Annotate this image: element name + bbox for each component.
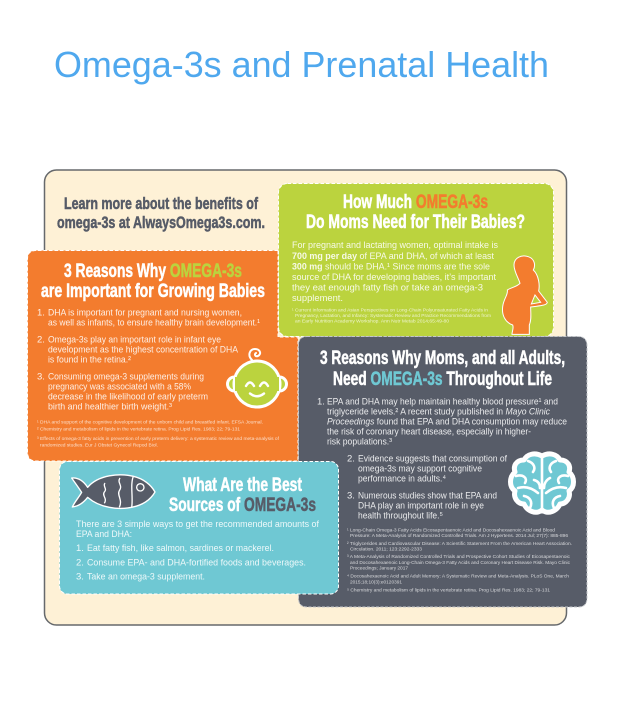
body text: best sources: 1. <box>76 543 84 554</box>
footnotes: how much omega-3s: an Early Nutrition Academy Workshop. Ann Nutr Metab 2014;65:49-80 <box>295 318 449 324</box>
body text: intake recommendation: For pregnant and lactating women, optimal intake is <box>292 240 498 251</box>
body text: intake recommendation: source of DHA for developing babies, it’s important <box>292 272 496 283</box>
body text: intake recommendation: they eat enough fatty fish or take an omega-3 <box>292 282 483 294</box>
footnotes: moms and adults: Pressure: A Meta-Analysis of Randomized Controlled Trials. Am J Hypertens. 2014 Jul; 27(7): 885-896 <box>350 533 568 539</box>
list: growing babies reasons: birth and healthier birth weight.³ <box>48 402 172 412</box>
footnotes: how much omega-3s <box>292 308 491 324</box>
icon: fish <box>72 475 155 508</box>
heading: how much omega-3s: How Much OMEGA-3s <box>343 191 488 213</box>
list: growing babies reasons: Consuming omega-3 supplements during <box>48 372 204 382</box>
list: moms and adults reasons: performance in adults.⁴ <box>358 474 446 484</box>
body text: intake recommendation: 700 mg per day of EPA and DHA, of which at least <box>292 251 494 262</box>
list: growing babies reasons: DHA is important for pregnant and nursing women, <box>48 308 242 318</box>
heading: moms and adults: Need OMEGA-3s Throughout Life <box>333 368 552 390</box>
list: moms and adults reasons: 1. <box>317 396 325 408</box>
list: moms and adults reasons: 3. <box>347 490 355 502</box>
heading: moms and adults <box>320 347 565 390</box>
footnotes: how much omega-3s: ¹ Current Information and Asian Perspectives on Long-Chain Polyunsaturated Fatty Acids in <box>292 308 488 314</box>
list: growing babies reasons: 3. <box>37 372 45 382</box>
list: moms and adults reasons: the risk of coronary heart disease, especially in higher- <box>327 426 531 438</box>
call to action text: Learn more about the benefits of <box>64 195 258 213</box>
heading: how much omega-3s: Do Moms Need for Their Babies? <box>306 211 525 233</box>
list: growing babies reasons: development as the highest concentration of DHA <box>48 344 239 356</box>
list: growing babies reasons: Omega-3s play an important role in infant eye <box>48 334 221 346</box>
body text: best sources: EPA and DHA: <box>76 529 132 540</box>
footnotes: moms and adults: ³ A Meta-Analysis of Randomized Controlled Trials and Prospective Cohort Studies of Eicosapentaenoic <box>347 554 571 560</box>
list: moms and adults reasons: DHA play an important role in eye <box>358 500 484 512</box>
body text: best sources: Consume EPA- and DHA-fortified foods and beverages. <box>87 558 306 568</box>
panel: cream background <box>44 170 566 625</box>
body text: intake recommendation: supplement. <box>292 293 343 304</box>
body text: best sources: 3. <box>76 572 84 582</box>
list: growing babies reasons <box>37 308 260 412</box>
list: moms and adults reasons: Proceedings found that EPA and DHA consumption may reduce <box>327 416 567 428</box>
call to action text: omega-3s at AlwaysOmega3s.com. <box>57 214 265 232</box>
icon: pregnant woman <box>502 256 547 334</box>
list: moms and adults reasons: Evidence suggests that consumption of <box>358 454 507 464</box>
heading: best sources <box>169 474 316 516</box>
list: growing babies reasons: decrease in the likelihood of early preterm <box>48 392 208 402</box>
body text: intake recommendation: 300 mg should be DHA.¹ Since moms are the sole <box>292 262 490 272</box>
heading: growing babies: are Important for Growing Babies <box>41 280 265 302</box>
list: moms and adults reasons: health throughout life.⁵ <box>358 510 443 522</box>
body text: intake recommendation <box>292 240 498 304</box>
footnotes: moms and adults: ¹ Long-Chain Omega-3 Fatty Acids Eicosapentaenoic Acid and Docosahexaenoic Acid and Blood <box>347 528 555 534</box>
icon: baby face <box>228 349 286 407</box>
call to action text <box>57 195 265 232</box>
list: growing babies reasons: as well as infants, to ensure healthy brain development.¹ <box>48 318 260 328</box>
footnotes: moms and adults <box>347 528 572 594</box>
footnotes: moms and adults: Circulation. 2011; 123:2292-2333 <box>350 546 422 552</box>
body text: best sources: Take an omega-3 supplement. <box>87 572 205 582</box>
heading: best sources: What Are the Best <box>183 474 302 496</box>
body text: best sources: There are 3 simple ways to get the recommended amounts of <box>76 519 319 530</box>
footnotes: growing babies: ³ Effects of omega-3 fatty acids in prevention of early preterm delivery: a systematic review and meta-analysis of <box>37 436 280 442</box>
list: growing babies reasons: 1. <box>37 308 45 318</box>
panel: how much omega-3s <box>278 184 554 336</box>
list: moms and adults reasons <box>317 396 567 522</box>
icon: brain <box>510 454 574 512</box>
list: moms and adults reasons: risk populations.³ <box>327 436 392 448</box>
footnotes: moms and adults: ⁴ Docosahexaenoic Acid and Adult Memory: A Systematic Review and Meta-Analysis. PLoS One, March <box>347 574 569 580</box>
list: growing babies reasons: 2. <box>37 334 45 346</box>
panel: best sources <box>60 462 338 594</box>
body text: best sources: Eat fatty fish, like salmon, sardines or mackerel. <box>87 543 274 554</box>
heading: growing babies <box>41 260 265 302</box>
list: moms and adults reasons: 2. <box>347 454 355 464</box>
footnotes: moms and adults: and Docosahexaenoic Long-Chain Omega-3 Fatty Acids and Coronary Heart Disease Risk. Mayo Clinic <box>350 560 571 566</box>
panel: 3 reasons growing babies <box>28 250 298 461</box>
heading: how much omega-3s <box>306 191 525 233</box>
footnotes: growing babies: ¹ DHA and support of the cognitive development of the unborn child and breastfed infant. EFSA Journal. <box>37 420 263 426</box>
list: moms and adults reasons: EPA and DHA may help maintain healthy blood pressure¹ and <box>327 396 558 408</box>
footnotes: growing babies: randomized studies. Eur J Obstet Gynecol Repod Biol. <box>40 442 158 448</box>
body text: best sources <box>76 519 319 582</box>
footnotes: growing babies: ² Chemistry and metabolism of lipids in the vertebrate retina. Prog Lipid Res. 1983; 22; 79-131 <box>37 426 240 432</box>
footnotes: growing babies <box>37 420 280 448</box>
body text: best sources: 2. <box>76 558 84 568</box>
list: growing babies reasons: pregnancy was associated with a 58% <box>48 382 191 392</box>
footnotes: how much omega-3s: Pregnancy, Lactation, and Infancy: Systematic Review and Practice Recommendations from <box>295 313 491 319</box>
list: growing babies reasons: is found in the retina.² <box>48 354 131 366</box>
heading: growing babies: 3 Reasons Why OMEGA-3s <box>64 260 242 282</box>
list: moms and adults reasons: omega-3s may support cognitive <box>358 464 482 474</box>
footnotes: moms and adults: ² Triglycerides and Cardiovascular Disease: A Scientific Statement From the American Heart Association. <box>347 541 572 547</box>
footnotes: moms and adults: 2015;18;10(3):e0120391 <box>350 580 402 586</box>
heading: best sources: Sources of OMEGA-3s <box>169 494 316 516</box>
list: moms and adults reasons: Numerous studies show that EPA and <box>358 490 497 502</box>
panel: moms and adults <box>298 336 587 607</box>
footnotes: moms and adults: ⁵ Chemistry and metabolism of lipids in the vertebrate retina. Prog Lipid Res. 1983; 22; 79-131 <box>347 588 550 594</box>
footnotes: moms and adults: Proceedings; January 2017 <box>350 566 408 572</box>
title: Omega-3s and Prenatal Health <box>54 44 549 85</box>
list: moms and adults reasons: triglyceride levels.² A recent study published in Mayo Clinic <box>327 406 550 418</box>
